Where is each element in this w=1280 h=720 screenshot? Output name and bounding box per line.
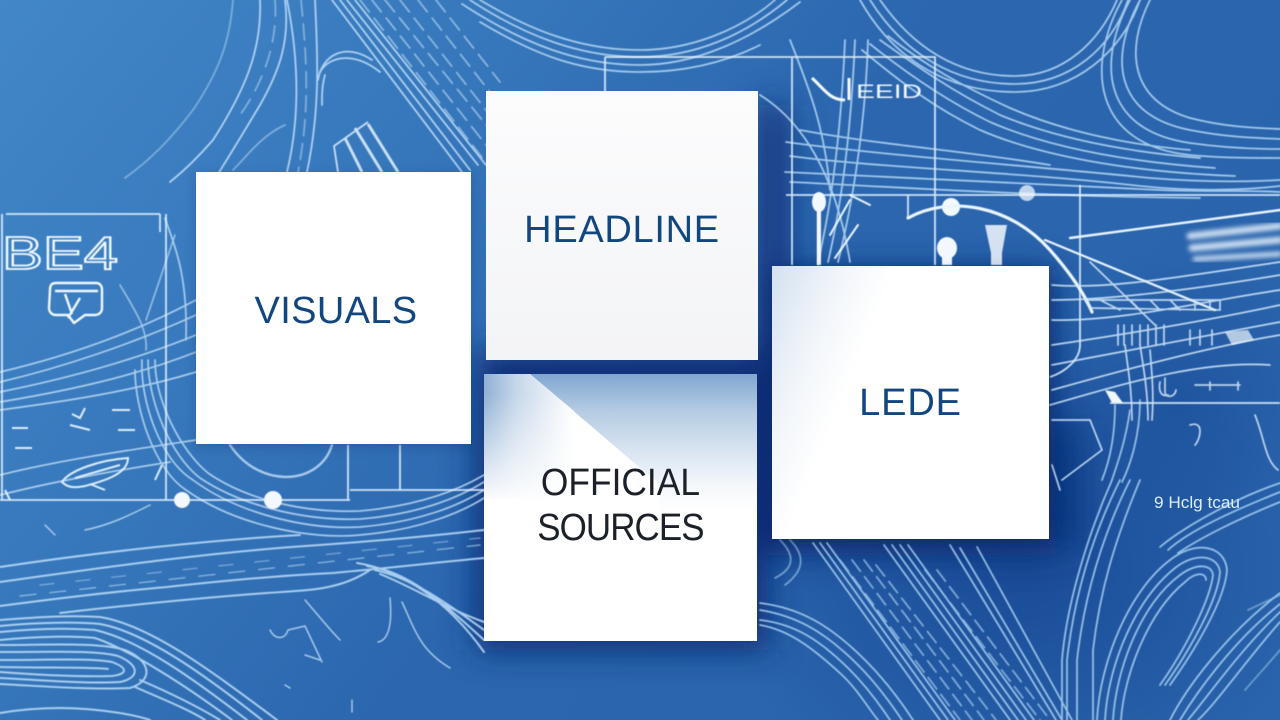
card: official sources: SOURCES — [537, 506, 704, 548]
card: visuals: VISUALS — [255, 290, 417, 332]
blueprint frames — [0, 57, 1280, 500]
sketch label: right frame heading — [812, 78, 922, 103]
card: official sources: OFFICIAL — [541, 462, 700, 504]
arc and diagonal road elements — [830, 195, 1280, 312]
sketch label: right frame heading: EEID — [856, 82, 922, 103]
card: official sources — [484, 374, 757, 641]
bright blobs near right road — [1105, 330, 1254, 403]
icon: fork-shaped road bars — [334, 122, 398, 172]
sketch label: lower right note: 9 Hclg tcau — [1154, 493, 1240, 512]
dark shadow behind cards — [476, 105, 1085, 650]
card: headline — [486, 91, 758, 360]
road lines: central highway and loop at bottom left — [0, 530, 484, 720]
card: headline: HEADLINE — [524, 208, 720, 250]
card: visuals — [196, 172, 471, 444]
sketch label: left frame heading: BE4 — [2, 227, 118, 279]
streaks and hatched boxes right of the lede card — [1050, 262, 1280, 490]
road lines: top arcs — [462, 0, 1280, 262]
map nodes and pins — [174, 185, 1035, 509]
icon: speech bubble sketch — [49, 283, 102, 323]
bright light streak at right — [1190, 226, 1280, 259]
card: lede — [772, 266, 1049, 539]
road lines: top left — [125, 0, 500, 182]
small sketched marks at bottom centre — [45, 505, 450, 712]
road lines: bottom right — [760, 400, 1280, 720]
sketch marks inside left frame — [5, 408, 162, 500]
card fold highlight — [484, 374, 659, 492]
card: lede: LEDE — [859, 382, 962, 424]
road lines: left frame area — [0, 218, 484, 536]
